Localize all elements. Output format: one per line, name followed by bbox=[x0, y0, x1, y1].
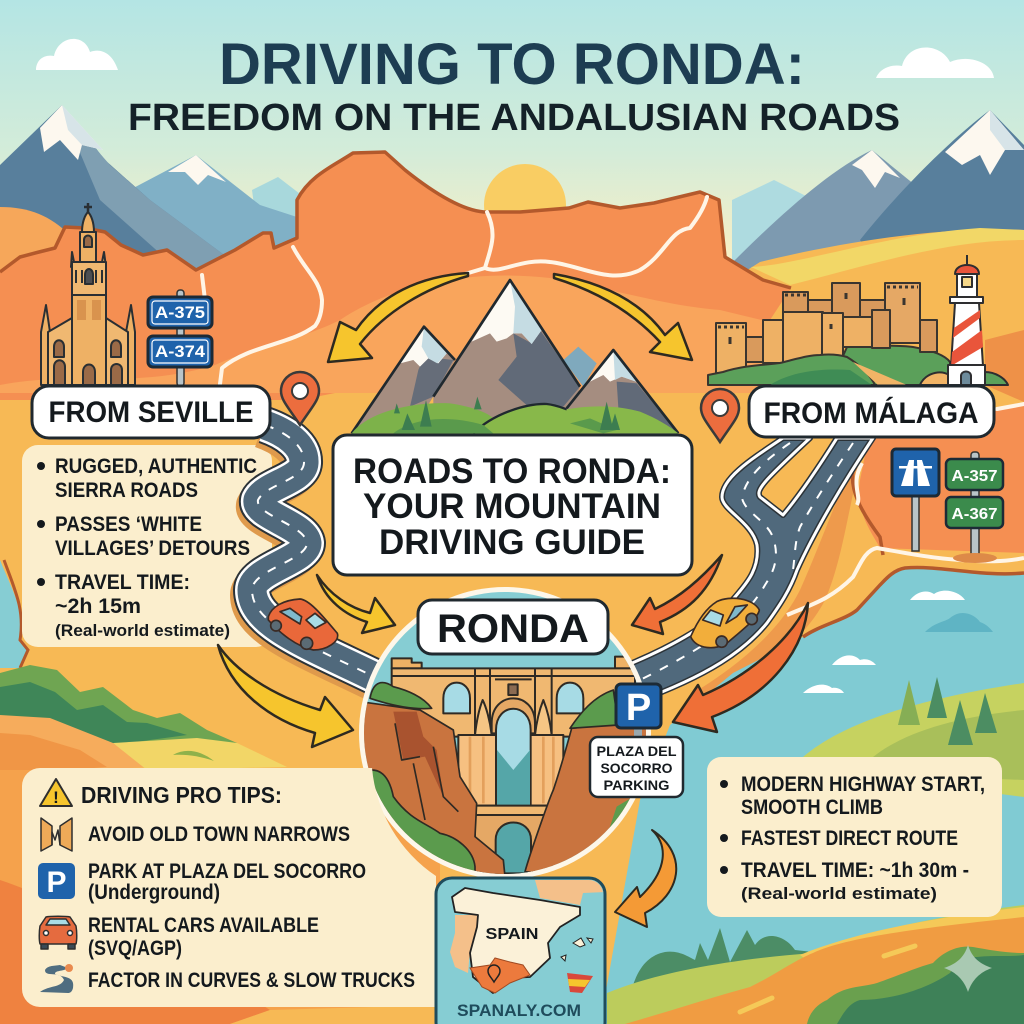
panel: Malaga route info: (Real-world estimate) bbox=[741, 884, 937, 903]
parking sign and label: P bbox=[626, 687, 651, 729]
cloud left bbox=[36, 39, 118, 70]
panel: Malaga route info: MODERN HIGHWAY START, bbox=[741, 773, 985, 796]
tip text: parking: PARK AT PLAZA DEL SOCORRO bbox=[88, 860, 366, 883]
panel: Ronda bridge circle bbox=[359, 587, 660, 880]
text block: Seville route bullets bbox=[37, 455, 257, 640]
region border bbox=[0, 152, 791, 288]
blue cloud bbox=[925, 613, 993, 632]
warning mark: ! bbox=[53, 788, 59, 807]
road sign: A-375 and A-374 bbox=[148, 290, 212, 386]
road sign: A-375 and A-374: A-375 bbox=[155, 303, 205, 322]
panel: Malaga route info: TRAVEL TIME: ~1h 30m - bbox=[741, 859, 969, 882]
arrow: lower right orange bbox=[673, 603, 808, 732]
heading: tips: DRIVING PRO TIPS: bbox=[81, 782, 282, 808]
Balearic islands bbox=[561, 938, 593, 961]
tip text: curves: FACTOR IN CURVES & SLOW TRUCKS bbox=[88, 969, 415, 992]
road sign: A-375 and A-374: A-374 bbox=[155, 342, 206, 361]
road sign: A-357 and A-367 bbox=[946, 452, 1003, 563]
Portugal bbox=[450, 915, 478, 973]
icon: map pin right bbox=[701, 389, 739, 442]
parking sign and label bbox=[590, 684, 683, 797]
right green hill and trees bbox=[803, 677, 1024, 797]
left sea strip bbox=[0, 560, 28, 668]
panel: central title card: YOUR MOUNTAIN bbox=[363, 487, 661, 526]
label: RONDA: RONDA bbox=[437, 607, 589, 651]
panel: Malaga route info: SMOOTH CLIMB bbox=[741, 796, 883, 819]
title: DRIVING TO RONDA: bbox=[219, 32, 805, 97]
icon: Malaga castle Alcazaba bbox=[708, 283, 950, 385]
parking sign and label: PLAZA DEL bbox=[596, 743, 677, 759]
label: RONDA bbox=[418, 600, 608, 654]
panel: central title card bbox=[333, 435, 692, 575]
mountains left bbox=[0, 105, 320, 290]
text block: Seville route bullets: RUGGED, AUTHENTIC bbox=[55, 455, 257, 478]
icon: rental car bbox=[39, 916, 77, 949]
title bbox=[128, 32, 900, 139]
arrow: top left yellow bbox=[328, 273, 468, 362]
arrow: lower left yellow bbox=[218, 645, 353, 747]
bottom right hills bbox=[607, 905, 1024, 1024]
panel: central title card: DRIVING GUIDE bbox=[379, 523, 645, 562]
terrain left hill bbox=[0, 207, 70, 300]
left hills bbox=[0, 665, 440, 1024]
arrow: to map orange bbox=[615, 830, 676, 927]
car: red bbox=[268, 599, 338, 650]
white coastal road bbox=[787, 463, 1024, 615]
icon: parking bbox=[38, 863, 75, 899]
orange right upper band bbox=[985, 330, 1024, 402]
arrow: mid right orange bbox=[632, 555, 722, 634]
white map roads bbox=[202, 197, 1024, 409]
text block: Seville route bullets: (Real-world estimate) bbox=[55, 621, 230, 640]
sea right bbox=[600, 568, 1024, 1024]
orange right lower band bbox=[859, 405, 1024, 553]
orange lighter band bbox=[0, 275, 770, 393]
panel: Malaga route info bbox=[707, 757, 1002, 917]
label: SPAIN: SPAIN bbox=[486, 926, 538, 943]
text block: Seville route bullets: SIERRA ROADS bbox=[55, 479, 198, 502]
icon: parking: P bbox=[46, 866, 67, 899]
panel: Spain locator map bbox=[436, 878, 605, 1024]
panel: Malaga route info: FASTEST DIRECT ROUTE bbox=[741, 827, 958, 850]
label: SPANALY.COM: SPANALY.COM bbox=[457, 1001, 581, 1020]
icon: winding road bbox=[40, 964, 73, 993]
text block: Seville route bullets: PASSES ‘WHITE bbox=[55, 513, 202, 536]
text block: Seville route bullets: VILLAGES’ DETOURS bbox=[55, 537, 250, 560]
tip text: underground: (Underground) bbox=[88, 881, 220, 904]
icon: warning triangle bbox=[40, 779, 72, 806]
mountains right bbox=[732, 110, 1024, 275]
parking sign and label: SOCORRO bbox=[600, 760, 673, 776]
Spain flag bbox=[567, 973, 593, 993]
bridge bbox=[392, 657, 635, 873]
icon: narrow street bbox=[41, 818, 72, 851]
motorway sign bbox=[892, 449, 939, 551]
terrain right hill yellow bbox=[751, 228, 1024, 285]
map pin bbox=[488, 965, 500, 982]
Andalusia orange region bbox=[0, 152, 791, 400]
label: FROM MALAGA: FROM MÁLAGA bbox=[764, 396, 978, 430]
sea clouds bbox=[803, 591, 965, 693]
arrow: mid left yellow bbox=[317, 575, 395, 633]
icon: lighthouse bbox=[920, 255, 1008, 385]
cloud right bbox=[876, 47, 994, 78]
text block: Seville route bullets: ~2h 15m bbox=[55, 595, 141, 618]
terrain base bbox=[0, 229, 1024, 1024]
tip text: airports: (SVQ/AGP) bbox=[88, 937, 182, 960]
label: FROM SEVILLE bbox=[32, 386, 270, 438]
central mountains bbox=[352, 280, 678, 433]
road from Seville bbox=[248, 425, 385, 687]
icon: map pin left bbox=[281, 372, 319, 425]
road from Malaga bbox=[620, 438, 873, 702]
Spain bbox=[452, 888, 580, 993]
title: FREEDOM ON THE ANDALUSIAN ROADS bbox=[128, 97, 900, 139]
arrow: top right yellow bbox=[554, 274, 692, 360]
panel: Seville route info background bbox=[22, 445, 272, 647]
road sign: A-357 and A-367: A-367 bbox=[952, 506, 998, 523]
Andalusia bbox=[470, 958, 530, 993]
panel: central title card: ROADS TO RONDA: bbox=[353, 452, 671, 491]
label: FROM MALAGA bbox=[749, 386, 994, 437]
car: yellow bbox=[691, 598, 759, 648]
label: FROM SEVILLE: FROM SEVILLE bbox=[48, 396, 254, 429]
tip text: rental: RENTAL CARS AVAILABLE bbox=[88, 914, 319, 937]
icon: Seville cathedral bbox=[41, 203, 135, 385]
left coast line bbox=[4, 560, 28, 668]
tip text: narrows: AVOID OLD TOWN NARROWS bbox=[88, 823, 350, 846]
sky background bbox=[0, 0, 1024, 300]
sand band right of Malaga road bbox=[690, 445, 865, 695]
cliffs and bushes bbox=[360, 683, 660, 877]
sun bbox=[484, 164, 566, 246]
coast line right bbox=[803, 470, 1024, 637]
France bbox=[535, 880, 605, 905]
parking sign and label: PARKING bbox=[604, 777, 670, 793]
text block: Seville route bullets: TRAVEL TIME: bbox=[55, 571, 190, 594]
road sign: A-357 and A-367: A-357 bbox=[952, 468, 998, 485]
panel: Driving pro tips bbox=[22, 768, 436, 1007]
